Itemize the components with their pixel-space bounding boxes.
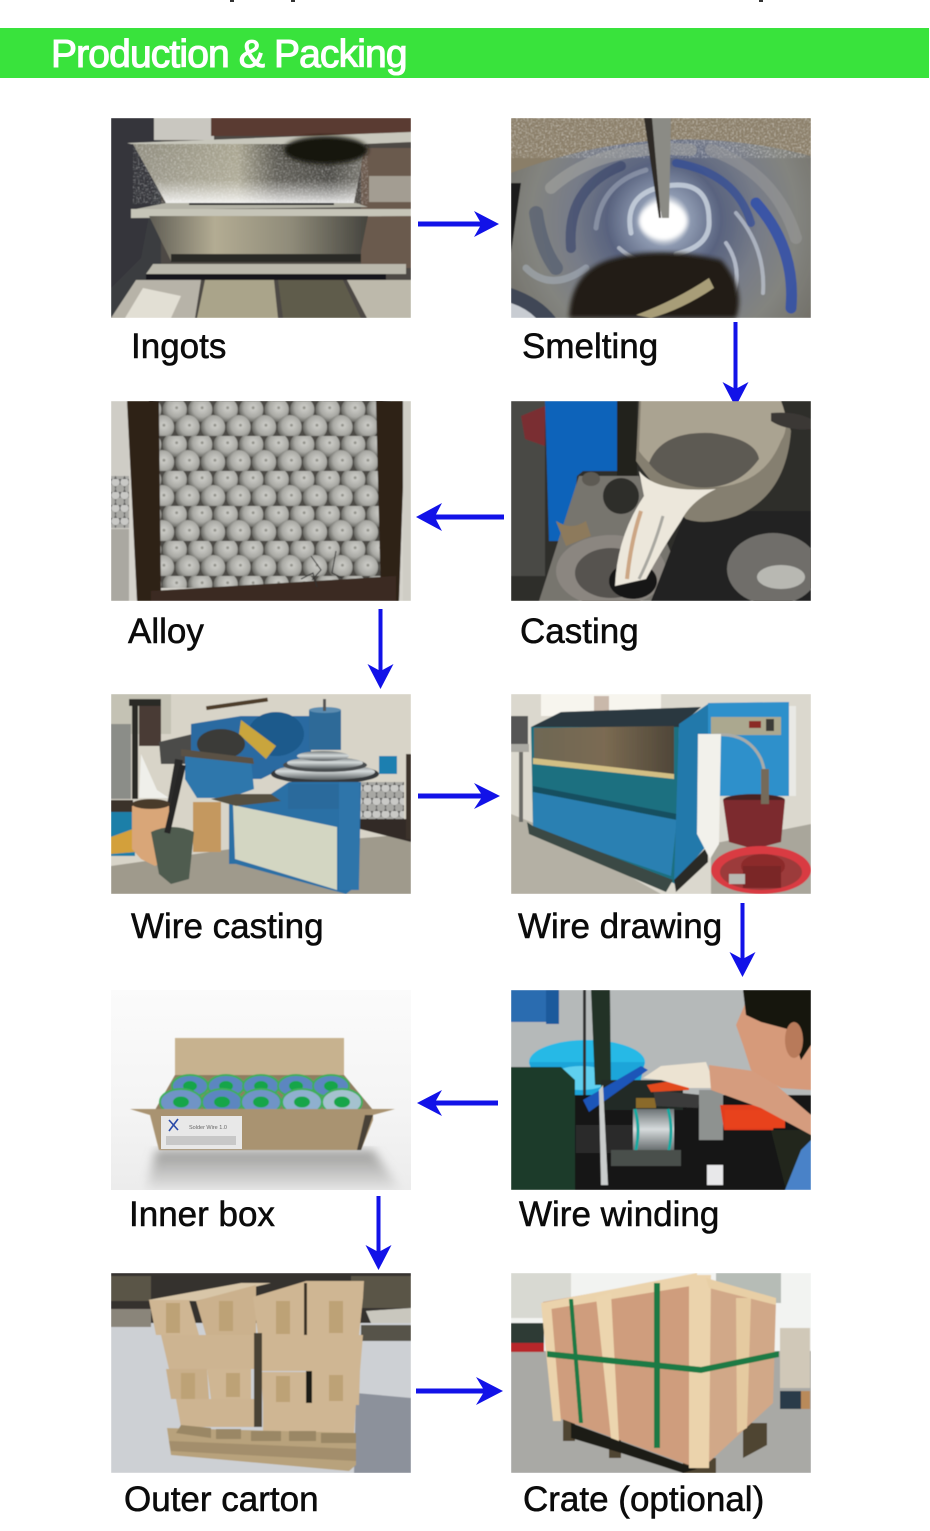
photo: casting <box>511 401 811 601</box>
photo: alloy <box>111 401 411 601</box>
arrow: wire casting to wire drawing <box>418 783 500 809</box>
box flap <box>175 1038 344 1075</box>
arrow: inner box to outer carton <box>366 1196 392 1270</box>
photo: wire drawing <box>511 694 811 894</box>
photo: ingots <box>111 118 411 318</box>
photo: outer carton <box>111 1273 411 1473</box>
label: Smelting: Smelting <box>522 327 658 366</box>
arrow: smelting to casting <box>722 322 748 402</box>
label: Wire winding: Wire winding <box>519 1195 719 1234</box>
spools <box>160 1075 362 1115</box>
arrow: alloy to wire casting <box>368 609 394 689</box>
box shadow <box>146 1150 401 1190</box>
box label <box>161 1116 242 1149</box>
heading: Production & Packing: Production & Packing <box>51 33 407 76</box>
photo: crate <box>511 1273 811 1473</box>
photo: wire casting <box>111 694 411 894</box>
photo: inner box <box>111 1037 411 1190</box>
arrow: ingots to smelting <box>418 211 499 237</box>
box label: Solder Wire 1.0 <box>189 1125 227 1131</box>
arrow: wire winding to inner box <box>417 1090 498 1116</box>
heading band <box>0 28 929 78</box>
top edge text fragments <box>230 0 763 2</box>
label: Alloy: Alloy <box>128 612 204 651</box>
label: Wire drawing: Wire drawing <box>518 907 722 946</box>
photo: wire winding <box>511 990 811 1190</box>
box front <box>130 1109 395 1150</box>
arrow: wire drawing to wire winding <box>730 903 756 977</box>
arrow: casting to alloy <box>416 503 504 531</box>
label: Inner box: Inner box <box>129 1195 275 1234</box>
arrow: outer carton to crate <box>416 1377 503 1405</box>
label: Outer carton: Outer carton <box>124 1480 319 1519</box>
label: Casting: Casting <box>520 612 639 651</box>
label: Ingots: Ingots <box>131 327 226 366</box>
label: Crate (optional): Crate (optional) <box>523 1480 764 1519</box>
label: Wire casting: Wire casting <box>131 907 324 946</box>
photo: smelting <box>511 118 811 318</box>
